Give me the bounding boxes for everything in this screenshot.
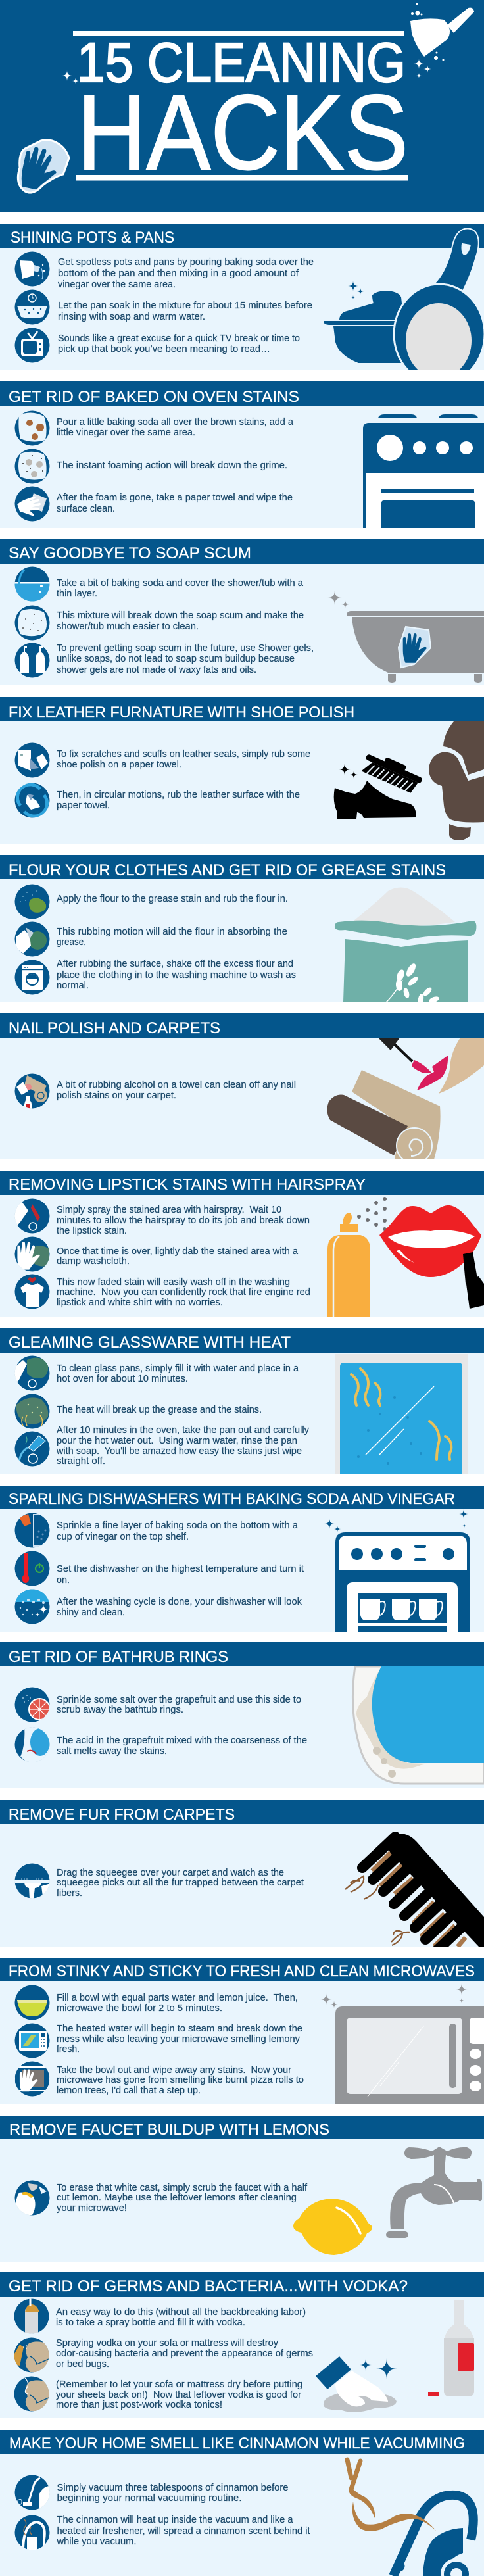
text: step 1 <box>57 749 310 770</box>
text: step 3 <box>56 2379 302 2410</box>
text: step 1 <box>57 1363 299 1384</box>
text: step 3: more than just post-work vodka tonics! <box>56 2400 222 2410</box>
illustration: flour sack <box>335 888 476 1005</box>
text: step 1: Simply vacuum three tablespoons of cinnamon before <box>57 2483 288 2493</box>
text: step 3: unlike soaps, do not lead to soap scum buildup because <box>57 654 295 664</box>
text: step 3: pick up that book you’ve been meaning to read… <box>58 344 270 354</box>
text: step 2 <box>56 2515 310 2547</box>
section 1: shining pots and pans <box>0 224 484 384</box>
text: step 1: fibers. <box>57 1888 82 1899</box>
icon: hand wiping microwave <box>14 2061 50 2097</box>
text: step 1: To fix scratches and scuffs on leather seats, simply rub some <box>57 749 310 760</box>
title line 1: 15 CLEANING <box>77 32 406 93</box>
text: step 1: scrub away the bathtub rings. <box>57 1705 183 1715</box>
text: step 2 <box>57 1564 304 1586</box>
text: step 3: with soap. You'll be amazed how easy the stains just wipe <box>56 1446 302 1457</box>
heading: GET RID OF BAKED ON OVEN STAINS <box>9 388 299 406</box>
text: step 1: microwave the bowl for 2 to 5 minutes. <box>57 2003 222 2014</box>
illustration: red lips <box>379 1205 481 1277</box>
illustration: pot and pan <box>324 229 484 384</box>
text: step 3: (Remember to let your sofa or mattress dry before putting <box>56 2379 302 2390</box>
heading: REMOVING LIPSTICK STAINS WITH HAIRSPRAY <box>9 1176 366 1194</box>
text: step 3: After the washing cycle is done, your dishwasher will look <box>57 1597 302 1607</box>
text: step 3 <box>58 333 300 354</box>
text: step 1: thin layer. <box>57 589 97 599</box>
text: step 1 <box>57 2183 308 2214</box>
icon: lemon water bowl <box>14 1985 50 2020</box>
text: step 3: normal. <box>57 981 89 991</box>
text: step 2: while you vacuum. <box>56 2537 137 2547</box>
icon: hand on cloth <box>399 627 431 668</box>
heading: MAKE YOUR HOME SMELL LIKE CINNAMON WHILE VACUMMING <box>9 2435 465 2452</box>
text: step 2: Then, in circular motions, rub the leather surface with the <box>57 790 300 800</box>
illustration: microwave <box>320 1983 484 2104</box>
text: step 2: rinsing with soap and warm water. <box>58 312 205 322</box>
text: step 1: shoe polish on a paper towel. <box>57 760 182 770</box>
text: step 3: To prevent getting soap scum in the future, use Shower gels, <box>57 643 314 654</box>
text: step 1: cut lemon. Maybe use the leftover lemons after cleaning <box>57 2193 297 2203</box>
text: step 3: This now faded stain will easily wash off in the washing <box>57 1277 290 1288</box>
icon: white shirt <box>14 1275 50 1309</box>
text: step 1 <box>57 578 304 599</box>
icon: hand wiping with cloth <box>18 140 69 193</box>
text: step 2: fresh. <box>57 2044 80 2054</box>
text: step 2: mess while also leaving your microwave smelling lemony <box>57 2034 301 2045</box>
heading: GET RID OF BATHRUB RINGS <box>9 1648 228 1666</box>
text: step 3 <box>57 959 296 991</box>
icon: duster with sparkles <box>410 3 474 78</box>
icon: washing machine <box>14 960 50 994</box>
text: step 2 <box>57 790 300 811</box>
illustration: rolled carpet and nail polish <box>327 1038 484 1163</box>
heading: NAIL POLISH AND CARPETS <box>9 1019 220 1037</box>
text: step 3: pour the hot water out. Using warm water, rinse the pan <box>57 1436 297 1446</box>
section 3: soap scum <box>0 539 484 685</box>
icon: television <box>14 328 50 363</box>
illustration: glass pan <box>335 1354 468 1474</box>
icon: lemon on faucet <box>14 2181 50 2215</box>
text: step 2: This mixture will break down the soap scum and make the <box>57 610 304 621</box>
section 15: cinnamon vacuuming <box>0 2430 484 2576</box>
icon: cup and dishwasher <box>14 1513 53 1548</box>
text: step 3 <box>57 493 293 514</box>
illustration: lipstick <box>463 1242 484 1309</box>
icon: grease breaking up <box>14 1394 50 1428</box>
section 13: faucet buildup <box>0 2116 484 2262</box>
text: step 1: To erase that white cast, simply scrub the faucet with a half <box>57 2183 308 2193</box>
icon: shower gel bottles <box>14 643 50 677</box>
icon: dabbing cloth <box>14 1236 50 1272</box>
icon: brown stains <box>14 410 50 446</box>
text: step 3: shower gels are not made of waxy fats and oils. <box>57 665 256 675</box>
text: step 3 <box>57 643 314 675</box>
text: step 1: Simply spray the stained area with hairspray. Wait 10 <box>57 1205 281 1215</box>
heading: GET RID OF GERMS AND BACTERIA...WITH VODKA? <box>9 2277 408 2295</box>
illustration: bathtub from above <box>352 1666 484 1784</box>
illustration: lemon <box>293 2199 372 2255</box>
text: step 1: your microwave! <box>57 2203 127 2214</box>
text: step 2 <box>57 610 304 632</box>
text: step 1 <box>57 1080 296 1101</box>
illustration: leather chair <box>429 721 484 840</box>
illustration: faucet <box>386 2147 482 2238</box>
text: step 2: odor-causing bacteria and prevent the appearance of germs <box>56 2348 313 2359</box>
heading: SPARLING DISHWASHERS WITH BAKING SODA AND VINEGAR <box>9 1490 455 1508</box>
text: step 1: minutes to allow the hairspray to do its job and break down <box>57 1215 310 1226</box>
icon: paper towel roll <box>14 743 50 777</box>
text: step 1: Apply the flour to the grease stain and rub the flour in. <box>57 894 288 904</box>
heading: REMOVE FAUCET BUILDUP WITH LEMONS <box>9 2121 329 2139</box>
heading: GLEAMING GLASSWARE WITH HEAT <box>9 1334 291 1351</box>
text: step 1: vinegar over the same area. <box>58 279 176 290</box>
text: step 2: Set the dishwasher on the highest temperature and turn it <box>57 1564 304 1574</box>
icon: spray and clock <box>14 1356 50 1390</box>
text: step 1: cup of vinegar on the top shelf. <box>57 1532 189 1542</box>
text: step 1: polish stains on your carpet. <box>57 1090 176 1101</box>
heading: FIX LEATHER FURNATURE WITH SHOE POLISH <box>9 704 354 721</box>
text: step 1 <box>57 1205 310 1236</box>
text: step 1 <box>56 2307 306 2328</box>
section 4: leather furniture <box>0 697 484 844</box>
text: step 1: is to take a spray bottle and fill it with vodka. <box>56 2318 245 2328</box>
icon: pouring into tub <box>14 567 50 602</box>
text: step 1 <box>57 417 294 438</box>
text: step 2: The heat will break up the grease and the stains. <box>57 1405 262 1415</box>
section 12: microwaves <box>0 1958 484 2104</box>
text: step 1: Sprinkle some salt over the grapefruit and use this side to <box>57 1695 301 1705</box>
section 7: lipstick stains <box>0 1171 484 1317</box>
icon: foam mixture <box>14 605 50 641</box>
text: step 2: on. <box>57 1575 70 1586</box>
text: step 3: surface clean. <box>57 504 115 514</box>
section 11: fur from carpets <box>0 1800 484 1951</box>
text: step 2 <box>57 1736 307 1757</box>
illustration: hand wiping spill <box>316 2356 397 2412</box>
text: step 1: the lipstick stain. <box>57 1226 127 1236</box>
text: step 1: An easy way to do this (without all the backbreaking labor) <box>56 2307 306 2318</box>
text: step 2 <box>57 1246 299 1267</box>
text: step 2: heated air freshener, will spread a cinnamon scent behind it <box>57 2526 310 2537</box>
text: step 3: microwave has gone from smelling like burnt pizza rolls to <box>57 2075 304 2085</box>
illustration: vacuum and cinnamon <box>347 2460 473 2576</box>
icon: carpet and alcohol <box>14 1073 50 1111</box>
illustration: hairspray can <box>327 1197 387 1317</box>
icon: baking soda box <box>14 251 50 287</box>
illustration: bathtub <box>327 591 484 683</box>
text: step 2: Let the pan soak in the mixture for about 15 minutes before <box>58 301 312 311</box>
text: step 3 <box>57 2065 304 2096</box>
text: step 3: Take the bowl out and wipe away any stains. Now your <box>57 2065 291 2076</box>
icon: microwave <box>14 2023 50 2058</box>
text: step 2: The heated water will begin to steam and break down the <box>57 2024 302 2034</box>
illustration: oven <box>363 414 484 528</box>
text: step 2 <box>57 2024 302 2054</box>
text: step 3: lipstick and white shirt with no worries. <box>57 1298 223 1308</box>
text: step 1: Drag the squeegee over your carpet and watch as the <box>57 1868 284 1878</box>
title banner <box>0 0 484 212</box>
section 9: dishwashers <box>0 1486 484 1632</box>
icon: foam <box>14 449 50 484</box>
text: step 3: lemon trees, I'd call that a step up. <box>57 2085 201 2096</box>
text: step 1: beginning your normal vacuuming routine. <box>57 2493 242 2504</box>
text: step 1 <box>57 1695 301 1715</box>
illustration: dishwasher <box>324 1509 470 1632</box>
text: step 1 <box>57 1993 298 2014</box>
text: step 2: salt melts away the stains. <box>57 1746 167 1757</box>
title line 2: HACKS <box>77 73 408 192</box>
text: step 1: A bit of rubbing alcohol on a towel can clean off any nail <box>57 1080 296 1090</box>
text: step 2: shower/tub much easier to clean. <box>57 621 199 632</box>
text: step 1 <box>58 257 314 290</box>
text: step 3: After rubbing the surface, shake off the excess flour and <box>57 959 293 969</box>
text: step 3: After 10 minutes in the oven, take the pan out and carefully <box>57 1425 310 1436</box>
icon: clock and bowl <box>14 289 50 325</box>
heading: REMOVE FUR FROM CARPETS <box>9 1806 235 1824</box>
text: step 2: The instant foaming action will break down the grime. <box>57 460 287 471</box>
text: step 2 <box>56 2338 313 2369</box>
text: step 2 <box>58 301 312 322</box>
text: step 1: squeegee picks out all the fur trapped between the carpet <box>57 1878 304 1888</box>
text: step 3: After the foam is gone, take a paper towel and wipe the <box>57 493 293 503</box>
text: step 3: place the clothing in to the washing machine to wash as <box>57 970 296 981</box>
text: step 2: or bed bugs. <box>56 2359 109 2369</box>
section 2: oven stains <box>0 381 484 528</box>
icon: grease stain <box>14 884 50 919</box>
text: step 2: The acid in the grapefruit mixed with the coarseness of the <box>57 1736 307 1746</box>
text: step 3: your sheets back on!) Now that leftover vodka is good for <box>56 2390 301 2400</box>
icon: hand with towel <box>14 487 50 521</box>
heading: SHINING POTS & PANS <box>11 229 174 247</box>
text: step 2: damp washcloth. <box>57 1256 130 1267</box>
text: step 1: bottom of the pan and then mixing in a good amount of <box>58 268 299 279</box>
section 8: glassware <box>0 1328 484 1474</box>
icon: cinnamon scent <box>14 2515 50 2551</box>
text: step 1: Pour a little baking soda all over the brown stains, add a <box>57 417 294 427</box>
text: step 1: To clean glass pans, simply fill it with water and place in a <box>57 1363 299 1374</box>
icon: scrubbing tub <box>14 1726 52 1764</box>
icon: squeegee <box>14 1864 51 1899</box>
icon: rubbing flour <box>14 922 50 956</box>
icon: clean foam <box>14 1589 50 1624</box>
heading: SAY GOODBYE TO SOAP SCUM <box>9 545 251 562</box>
heading: FLOUR YOUR CLOTHES AND GET RID OF GREASE STAINS <box>9 862 446 879</box>
text: step 3: shiny and clean. <box>57 1607 125 1618</box>
icon: spraying sofa <box>14 2337 49 2373</box>
text: step 3 <box>57 1277 310 1308</box>
text: step 1: Fill a bowl with equal parts water and lemon juice. Then, <box>57 1993 298 2003</box>
text: step 3: straight off. <box>57 1456 105 1467</box>
icon: pouring out water <box>14 1431 50 1467</box>
icon: circular motion <box>14 783 50 818</box>
text: step 2 <box>57 927 287 948</box>
icon: thermometer and power <box>14 1551 50 1586</box>
text: step 1 <box>57 2483 288 2504</box>
icon: spray with clock <box>14 1198 50 1234</box>
text: step 1: Sprinkle a fine layer of baking soda on the bottom with a <box>57 1520 299 1531</box>
text: step 1: little vinegar over the same area. <box>57 427 195 438</box>
section 10: bathtub rings <box>0 1642 484 1788</box>
icon: drying sofa <box>14 2377 49 2411</box>
icon: spray bottle <box>14 2298 49 2335</box>
illustration: vodka bottle <box>428 2300 474 2396</box>
text: step 2: The cinnamon will heat up inside the vacuum and like a <box>57 2515 293 2525</box>
text: step 3: Sounds like a great excuse for a quick TV break or time to <box>58 333 300 344</box>
text: step 2: Once that time is over, lightly dab the stained area with a <box>57 1246 299 1257</box>
icon: sparkles left <box>62 70 79 84</box>
section 6: nail polish and carpets <box>0 1013 484 1163</box>
text: step 2: paper towel. <box>57 800 110 811</box>
text: step 3 <box>57 1597 302 1618</box>
illustration: shoe and brush <box>334 750 425 819</box>
text: step 2: Spraying vodka on your sofa or mattress will destroy <box>56 2338 279 2348</box>
text: step 1: hot oven for about 10 minutes. <box>57 1374 188 1384</box>
text: step 1: Take a bit of baking soda and cover the shower/tub with a <box>57 578 304 589</box>
section 14: germs and vodka <box>0 2272 484 2418</box>
text: step 3 <box>56 1425 310 1467</box>
icon: grapefruit with salt <box>14 1688 51 1722</box>
text: step 2: This rubbing motion will aid the flour in absorbing the <box>57 927 287 937</box>
text: step 1 <box>57 1520 299 1542</box>
text: step 3: machine. Now you can confidently rock that fire engine red <box>57 1287 310 1298</box>
text: step 1: Get spotless pots and pans by pouring baking soda over the <box>58 257 314 268</box>
section 5: flour and grease <box>0 855 484 1005</box>
text: step 2: grease. <box>57 937 86 948</box>
illustration: comb with fur <box>345 1834 484 1951</box>
icon: vacuum <box>14 2475 51 2511</box>
text: step 1 <box>57 1868 304 1899</box>
